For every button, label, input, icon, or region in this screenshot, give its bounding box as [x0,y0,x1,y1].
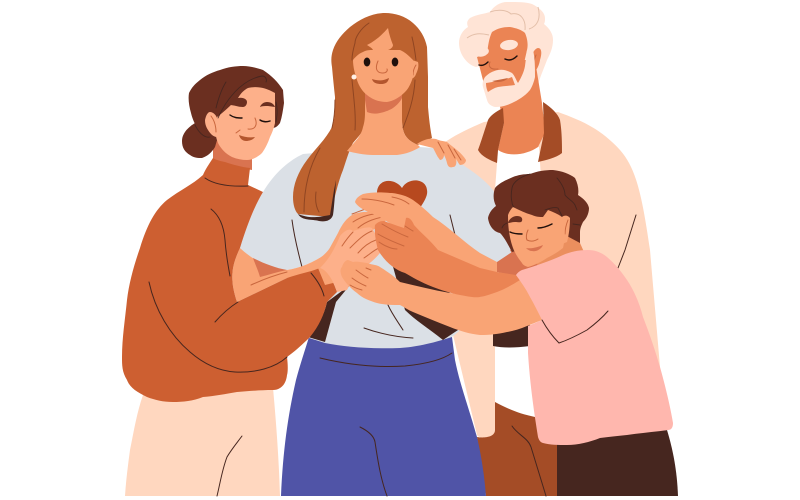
hair back [488,170,589,252]
hair strands [304,23,416,212]
mouth [372,78,389,84]
trousers [557,430,678,496]
eyes [510,224,552,234]
face [477,27,528,88]
nose [236,118,256,133]
ear [205,112,217,137]
hair strands [502,174,580,228]
face [215,87,275,160]
eyebrow [508,216,522,223]
sleeve fold [542,311,608,343]
earring [352,74,356,80]
closed eyes [479,56,517,65]
trouser crease [217,436,242,496]
cardigan [440,112,660,438]
eyebrows [217,98,275,117]
under-chin shadow [510,240,560,272]
trousers [477,402,560,496]
trouser crease [512,426,546,496]
trousers [125,388,280,496]
mouth [526,245,543,251]
neck shadow [365,90,402,114]
sweater folds [149,178,324,372]
figure: mother [122,66,337,496]
neck shadow [213,140,252,170]
beard [483,50,535,107]
hair [189,66,284,138]
face [353,28,413,102]
boy arm [340,260,548,335]
arm under shirt [232,233,338,302]
central hands and arms [318,180,548,340]
mouth [239,135,255,141]
arm shadow [253,258,287,277]
bun [182,120,220,158]
dark lining [493,320,530,348]
shirt creases [292,215,455,338]
undershirt [495,147,545,417]
ear [411,60,418,78]
mouth [486,77,515,92]
hair tip [298,180,336,221]
hair strands [195,76,277,137]
skirt crease [360,427,387,496]
mother hand [320,227,381,292]
figure: grandfather [440,2,660,496]
elbow shadow [497,252,535,276]
ear [560,216,570,245]
collar [478,102,562,163]
figure: boy [488,170,678,496]
skirt waist line [320,353,452,367]
lower dark shirt under boy arm [493,325,528,340]
eyebrows [499,39,519,51]
hand on shoulder [417,139,466,167]
dark lining [308,263,458,342]
nose [376,61,387,73]
neck [347,95,420,155]
figure: tall woman [232,13,518,496]
sweater [122,158,337,402]
ear [531,48,541,72]
neck [498,60,545,154]
eyes [364,58,370,66]
woman top hand and forearm [355,192,497,275]
neck [535,235,584,270]
woman back hand [318,212,388,285]
hair curls [467,7,539,38]
hair [293,13,432,217]
cardigan crease [618,215,636,268]
skirt [281,337,486,496]
hair [459,2,553,84]
nose [489,62,498,69]
nose [526,230,538,241]
heart [377,180,427,210]
grandfather arm and hand [375,218,520,297]
face [508,207,565,267]
t-shirt [240,147,518,348]
t-shirt [516,250,673,445]
closed eyes [230,115,270,122]
